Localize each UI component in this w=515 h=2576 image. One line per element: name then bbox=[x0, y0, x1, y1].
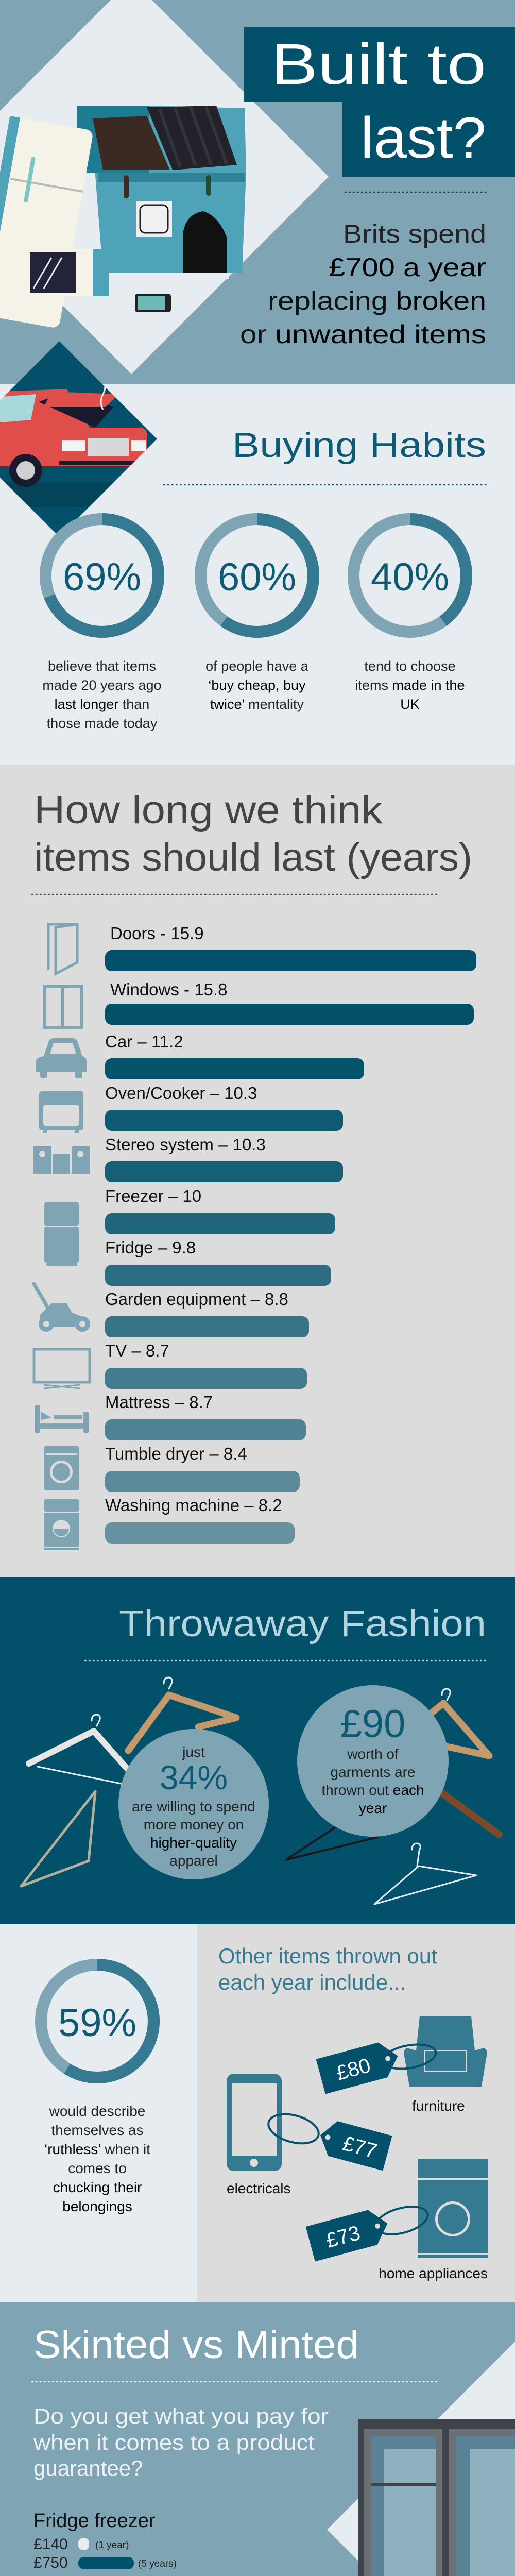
callout: £90 circle: year bbox=[359, 1800, 387, 1816]
title box: Built to last?: Built to bbox=[271, 32, 486, 96]
heading: Other items thrown out bbox=[218, 1944, 437, 1994]
icon: fridge bbox=[44, 1202, 79, 1266]
icon: bed bbox=[35, 1405, 89, 1433]
bar chart: item lifespans: Washing machine – 8.2 bbox=[105, 1496, 282, 1515]
icon: window bbox=[44, 986, 81, 1027]
bar chart: item lifespans: Car – 11.2 bbox=[105, 1032, 183, 1051]
bar chart: item lifespans: Oven/Cooker – 10.3 bbox=[105, 1083, 257, 1103]
stat: 40%: tend to choose bbox=[364, 658, 456, 674]
icon: armchair with £80 tag: £80 bbox=[334, 2054, 373, 2085]
callout: £90 circle: thrown out each bbox=[321, 1782, 424, 1798]
stat: 59% ruthless: themselves as bbox=[52, 2122, 143, 2138]
stat: 59% ruthless: belongings bbox=[62, 2198, 132, 2214]
subtitle: Brits spend £700: replacing broken bbox=[268, 286, 486, 315]
stat: 59% ruthless: ‘ruthless’ when it bbox=[44, 2141, 150, 2157]
bar chart: item lifespans: TV – 8.7 bbox=[105, 1341, 169, 1360]
guarantee comparison bars bbox=[33, 2510, 349, 2576]
icon: phone with £77 tag: £77 bbox=[340, 2132, 379, 2163]
illustration: window bbox=[358, 2419, 515, 2576]
dark diamond with car illustration bbox=[0, 341, 165, 537]
header: light diamond bbox=[0, 0, 329, 374]
bar chart: item lifespans: Mattress – 8.7 bbox=[105, 1393, 213, 1412]
stat: 69%: those made today bbox=[47, 716, 158, 731]
bar chart: item lifespans: Tumble dryer – 8.4 bbox=[105, 1444, 247, 1463]
stat: 60%: twice’ mentality bbox=[210, 697, 304, 712]
subtitle: Brits spend £700: or unwanted items bbox=[240, 320, 486, 349]
stat: 69% bbox=[42, 519, 162, 731]
callout: 34% circle bbox=[118, 1729, 269, 1879]
icon: armchair with £80 tag: furniture bbox=[412, 2098, 465, 2114]
Fridge freezer: Fridge freezer bbox=[33, 2510, 156, 2532]
icon: TV bbox=[34, 1349, 90, 1388]
heading: Other items thrown out: Other items thrown out bbox=[218, 1944, 437, 1968]
subtitle: Brits spend £700 bbox=[240, 219, 486, 349]
stat: 69%: 69% bbox=[63, 555, 141, 599]
title box: Built to last?: last? bbox=[360, 106, 486, 170]
stat: 59% ruthless: would describe bbox=[49, 2103, 145, 2119]
bar chart: item lifespans: Stereo system – 10.3 bbox=[105, 1135, 266, 1154]
stat: 40% bbox=[353, 519, 467, 712]
subtitle: Brits spend £700: Brits spend bbox=[343, 219, 486, 248]
icon: phone with £77 tag bbox=[227, 2074, 392, 2196]
stat: 59% ruthless: chucking their bbox=[53, 2179, 142, 2195]
bar chart: item lifespans: Freezer – 10 bbox=[105, 1187, 201, 1206]
heading: How long we think items should last: How long we think bbox=[34, 788, 383, 832]
icon: stereo bbox=[33, 1146, 90, 1174]
background: light triangle right bbox=[327, 2342, 515, 2576]
icon: armchair with £80 tag bbox=[316, 2016, 487, 2114]
stat: 40%: 40% bbox=[371, 555, 449, 599]
callout: £90 circle: £90 bbox=[340, 1702, 405, 1746]
icon: washing machine with £73 tag bbox=[306, 2159, 488, 2281]
subtitle: Brits spend £700: £700 a year bbox=[329, 253, 486, 282]
heading: How long we think items should last: items should last (years) bbox=[34, 836, 472, 879]
icon: oven bbox=[39, 1091, 83, 1133]
callout: 34% circle: apparel bbox=[169, 1853, 218, 1869]
question text: when it comes to a product bbox=[33, 2430, 315, 2454]
Fridge freezer: £750 bbox=[33, 2554, 68, 2571]
heading: How long we think items should last bbox=[34, 788, 472, 879]
title box: Built to last? bbox=[244, 27, 515, 177]
illustration: dumpster with fridge and oven bbox=[0, 106, 246, 329]
icon: car bbox=[36, 1038, 87, 1078]
Fridge freezer bbox=[33, 2510, 177, 2571]
bar chart: item lifespans: Fridge – 9.8 bbox=[105, 1238, 196, 1257]
callout: 34% circle: 34% bbox=[160, 1758, 228, 1797]
icon: washing machine bbox=[44, 1499, 79, 1550]
callout: £90 circle bbox=[297, 1685, 449, 1837]
icon: phone with £77 tag: electricals bbox=[227, 2180, 290, 2196]
stat: 59% ruthless bbox=[41, 1965, 153, 2214]
bar chart icons bbox=[33, 924, 90, 1550]
stat: 40%: UK bbox=[400, 697, 420, 712]
bar chart: item lifespans: Garden equipment – 8.8 bbox=[105, 1290, 288, 1309]
stat: 69%: made 20 years ago bbox=[42, 677, 162, 693]
icon: washing machine with £73 tag: home appliances bbox=[379, 2265, 488, 2281]
callout: £90 circle: garments are bbox=[331, 1764, 415, 1780]
callout: 34% circle: just bbox=[182, 1744, 205, 1760]
stat: 69%: believe that items bbox=[48, 658, 156, 674]
icon: lawn mower bbox=[34, 1284, 90, 1332]
Fridge freezer: (5 years) bbox=[138, 2558, 177, 2569]
bar chart: item lifespans: Doors - 15.9 bbox=[110, 924, 204, 943]
question text: guarantee? bbox=[33, 2456, 143, 2480]
callout: £90 circle: worth of bbox=[347, 1746, 399, 1762]
Fridge freezer: £140 bbox=[33, 2536, 68, 2553]
bar chart: item lifespans: Windows - 15.8 bbox=[110, 980, 227, 999]
stat: 60%: 60% bbox=[218, 555, 296, 599]
callout: 34% circle: more money on bbox=[144, 1817, 244, 1833]
stat: 60%: ‘buy cheap, buy bbox=[208, 677, 306, 693]
stat: 60%: of people have a bbox=[205, 658, 309, 674]
icon: door bbox=[48, 924, 77, 974]
icon: washing machine with £73 tag: £73 bbox=[323, 2222, 363, 2252]
heading: Throwaway Fashion: Throwaway Fashion bbox=[119, 1603, 486, 1645]
icon: tumble dryer bbox=[44, 1446, 79, 1490]
heading: Other items thrown out: each year include... bbox=[218, 1970, 406, 1994]
heading: Skinted vs Minted: Skinted vs Minted bbox=[33, 2323, 359, 2367]
stat: 60% bbox=[201, 519, 313, 712]
callout: 34% circle: higher-quality bbox=[150, 1835, 237, 1851]
stat: 69%: last longer than bbox=[55, 697, 149, 712]
stat: 59% ruthless: 59% bbox=[58, 2001, 136, 2045]
bar chart: item lifespans bbox=[105, 924, 476, 1544]
callout: 34% circle: are willing to spend bbox=[132, 1799, 255, 1815]
heading: Buying Habits: Buying Habits bbox=[232, 426, 486, 465]
stat: 40%: items made in the bbox=[355, 677, 465, 693]
hangers illustration bbox=[21, 1677, 499, 1904]
question text bbox=[33, 2404, 329, 2480]
question text: Do you get what you pay for bbox=[33, 2404, 329, 2428]
stat: 59% ruthless: comes to bbox=[68, 2160, 127, 2176]
Fridge freezer: (1 year) bbox=[95, 2540, 129, 2551]
